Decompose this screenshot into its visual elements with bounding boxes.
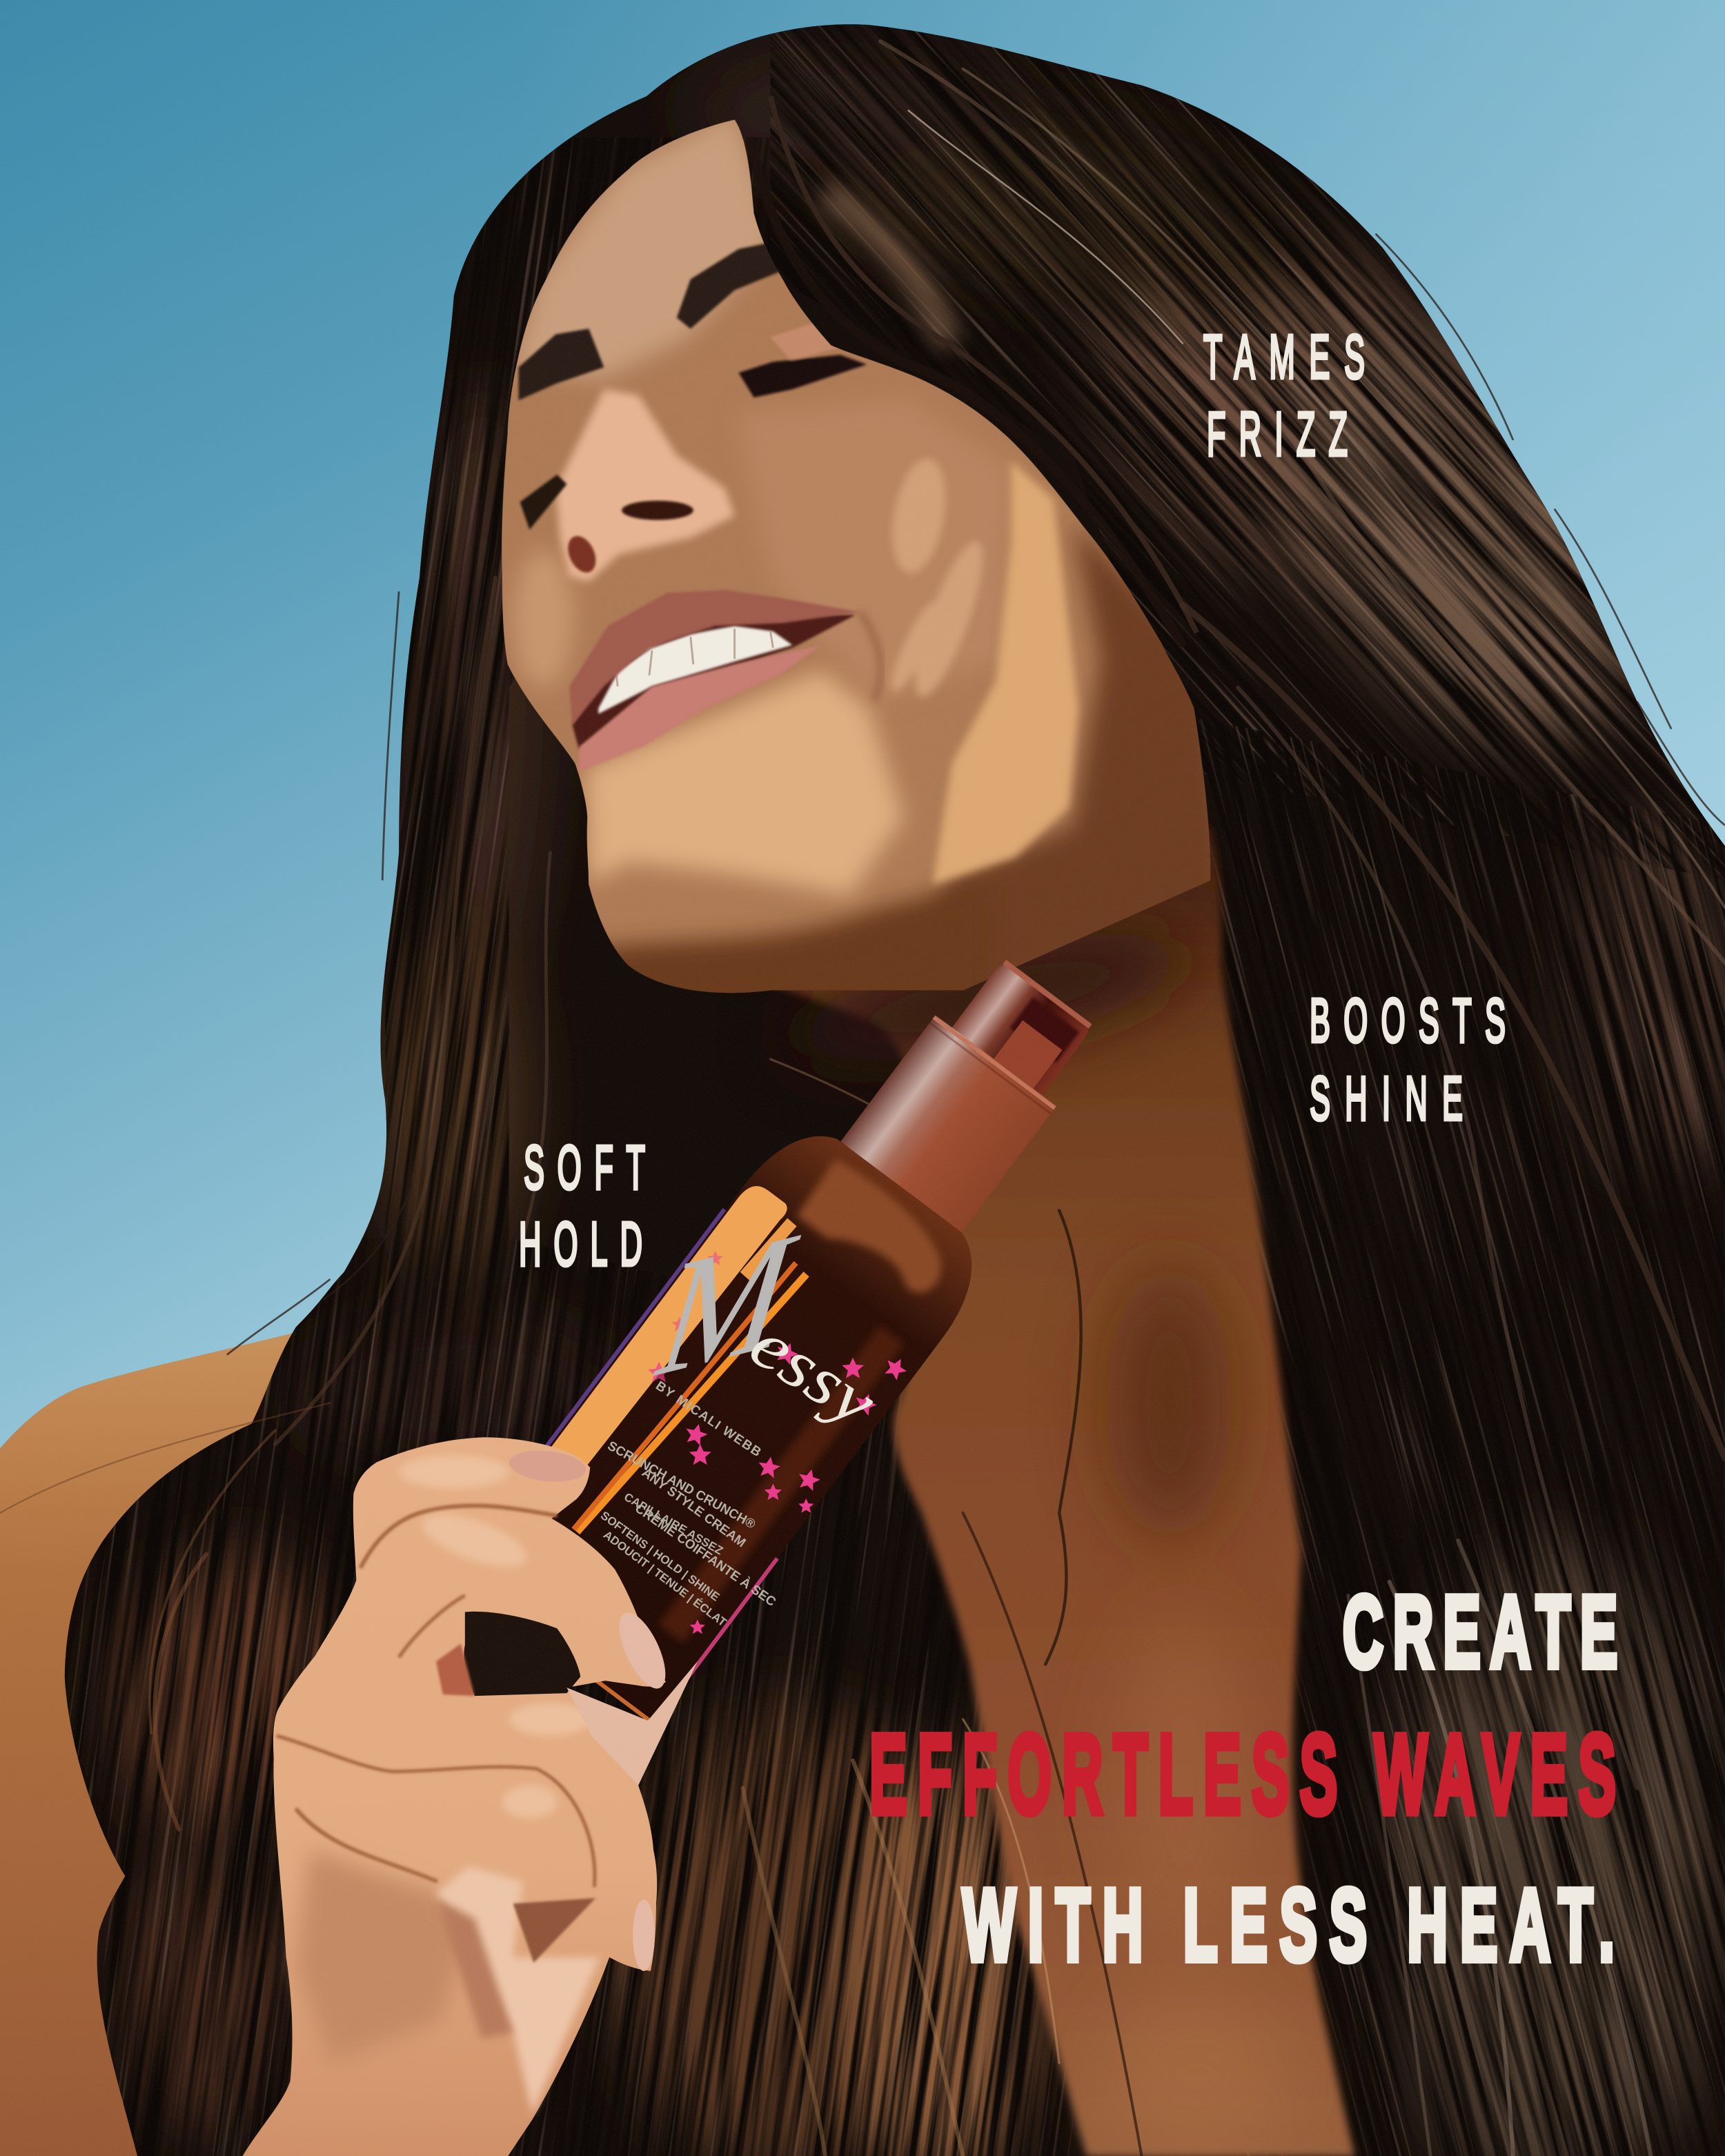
- mid cheek tone: [736, 399, 1011, 702]
- shadow between ring finger and pinkie: [513, 1898, 595, 1963]
- headline: [869, 1575, 1617, 1982]
- face: [468, 97, 1238, 1045]
- pump head: [949, 958, 1094, 1098]
- bottle logo: essy: [738, 1305, 890, 1441]
- hand holding bottle: [242, 1437, 698, 2156]
- bottle logo: [648, 1196, 890, 1460]
- headline: WITH LESS HEAT.: [963, 1868, 1615, 1982]
- finger creases: [277, 1505, 595, 1887]
- bottle label text: CRÈME COIFFANTE À SEC: [632, 1501, 779, 1610]
- label: tames frizz: [1203, 323, 1365, 469]
- bottle label text: ANY STYLE CREAM: [639, 1465, 748, 1550]
- palm diagonal shadow: [436, 1898, 513, 2039]
- lit right cheek: [933, 461, 1078, 884]
- label: tames frizz: TAMES: [1203, 323, 1365, 392]
- palm shadow: [296, 1850, 475, 2063]
- bottle stars: [648, 1251, 911, 1634]
- nose: [555, 389, 735, 582]
- bottle label text: CAPILLAIRE ASSEZ: [622, 1490, 725, 1558]
- under-jaw shadow: [591, 880, 990, 1045]
- lower lip: [579, 645, 821, 771]
- mouth interior: [572, 612, 856, 750]
- label: soft hold: SOFT: [524, 1134, 645, 1203]
- finger nails: [508, 1447, 675, 1971]
- label: boosts shine: SHINE: [1310, 1065, 1463, 1134]
- lit palm: [436, 1866, 600, 2114]
- pump collar: [840, 1015, 1056, 1232]
- thumb sliver: [566, 1661, 698, 1786]
- bottle body: [453, 1111, 1000, 1723]
- nostrils: [562, 501, 693, 577]
- neck shading: [778, 907, 1293, 2156]
- bangs highlights and loose strands: [750, 97, 1196, 646]
- label: boosts shine: [1310, 987, 1506, 1134]
- knuckle highlights: [399, 1455, 591, 1819]
- product bottle: [452, 914, 1147, 1723]
- bottle label text: [598, 1438, 779, 1630]
- shoulder reflection: [795, 1156, 962, 1307]
- purple edge: [535, 1209, 724, 1463]
- smile crease: [860, 612, 880, 702]
- bottle label text: ADOUCIT | TENUE | ÉCLAT: [601, 1528, 729, 1630]
- flyaway hair wisps at the silhouette: [227, 234, 1725, 1355]
- label: soft hold: HOLD: [519, 1210, 642, 1279]
- orange reflection band: [522, 1179, 791, 1515]
- upper lip: [569, 590, 860, 725]
- forehead light: [512, 110, 777, 378]
- label: boosts shine: BOOSTS: [1310, 987, 1506, 1056]
- dappled cheek highlight: [884, 455, 996, 703]
- bottle logo: M: [648, 1196, 807, 1412]
- lit chin: [584, 670, 904, 896]
- right side brown sheen: [657, 1325, 906, 1643]
- teeth: [598, 626, 792, 714]
- bottle label text: SOFTENS | HOLD | SHINE: [598, 1509, 722, 1603]
- headline: EFFORTLESS WAVES: [869, 1712, 1616, 1837]
- shadowed cheek and jaw side: [880, 523, 1238, 1045]
- bottle label text: SCRUNCH AND CRUNCH®: [605, 1438, 758, 1532]
- pink edge line and base rim: [455, 1410, 777, 1723]
- label: tames frizz: FRIZZ: [1207, 400, 1348, 469]
- neck and chest: [716, 825, 1355, 2156]
- inner finger red shadow: [436, 1643, 475, 1696]
- thin orange reflections: [562, 1219, 826, 1550]
- bottle logo: BY MICALI WEBB: [653, 1378, 764, 1460]
- gap between fingers showing hair: [464, 1612, 580, 1696]
- eyebrows: [519, 241, 788, 400]
- label: soft hold: [519, 1134, 645, 1279]
- left cheek light: [513, 550, 573, 688]
- shoulder: [0, 1327, 413, 2156]
- headline: CREATE: [1343, 1575, 1617, 1689]
- closed eyes: [520, 319, 867, 530]
